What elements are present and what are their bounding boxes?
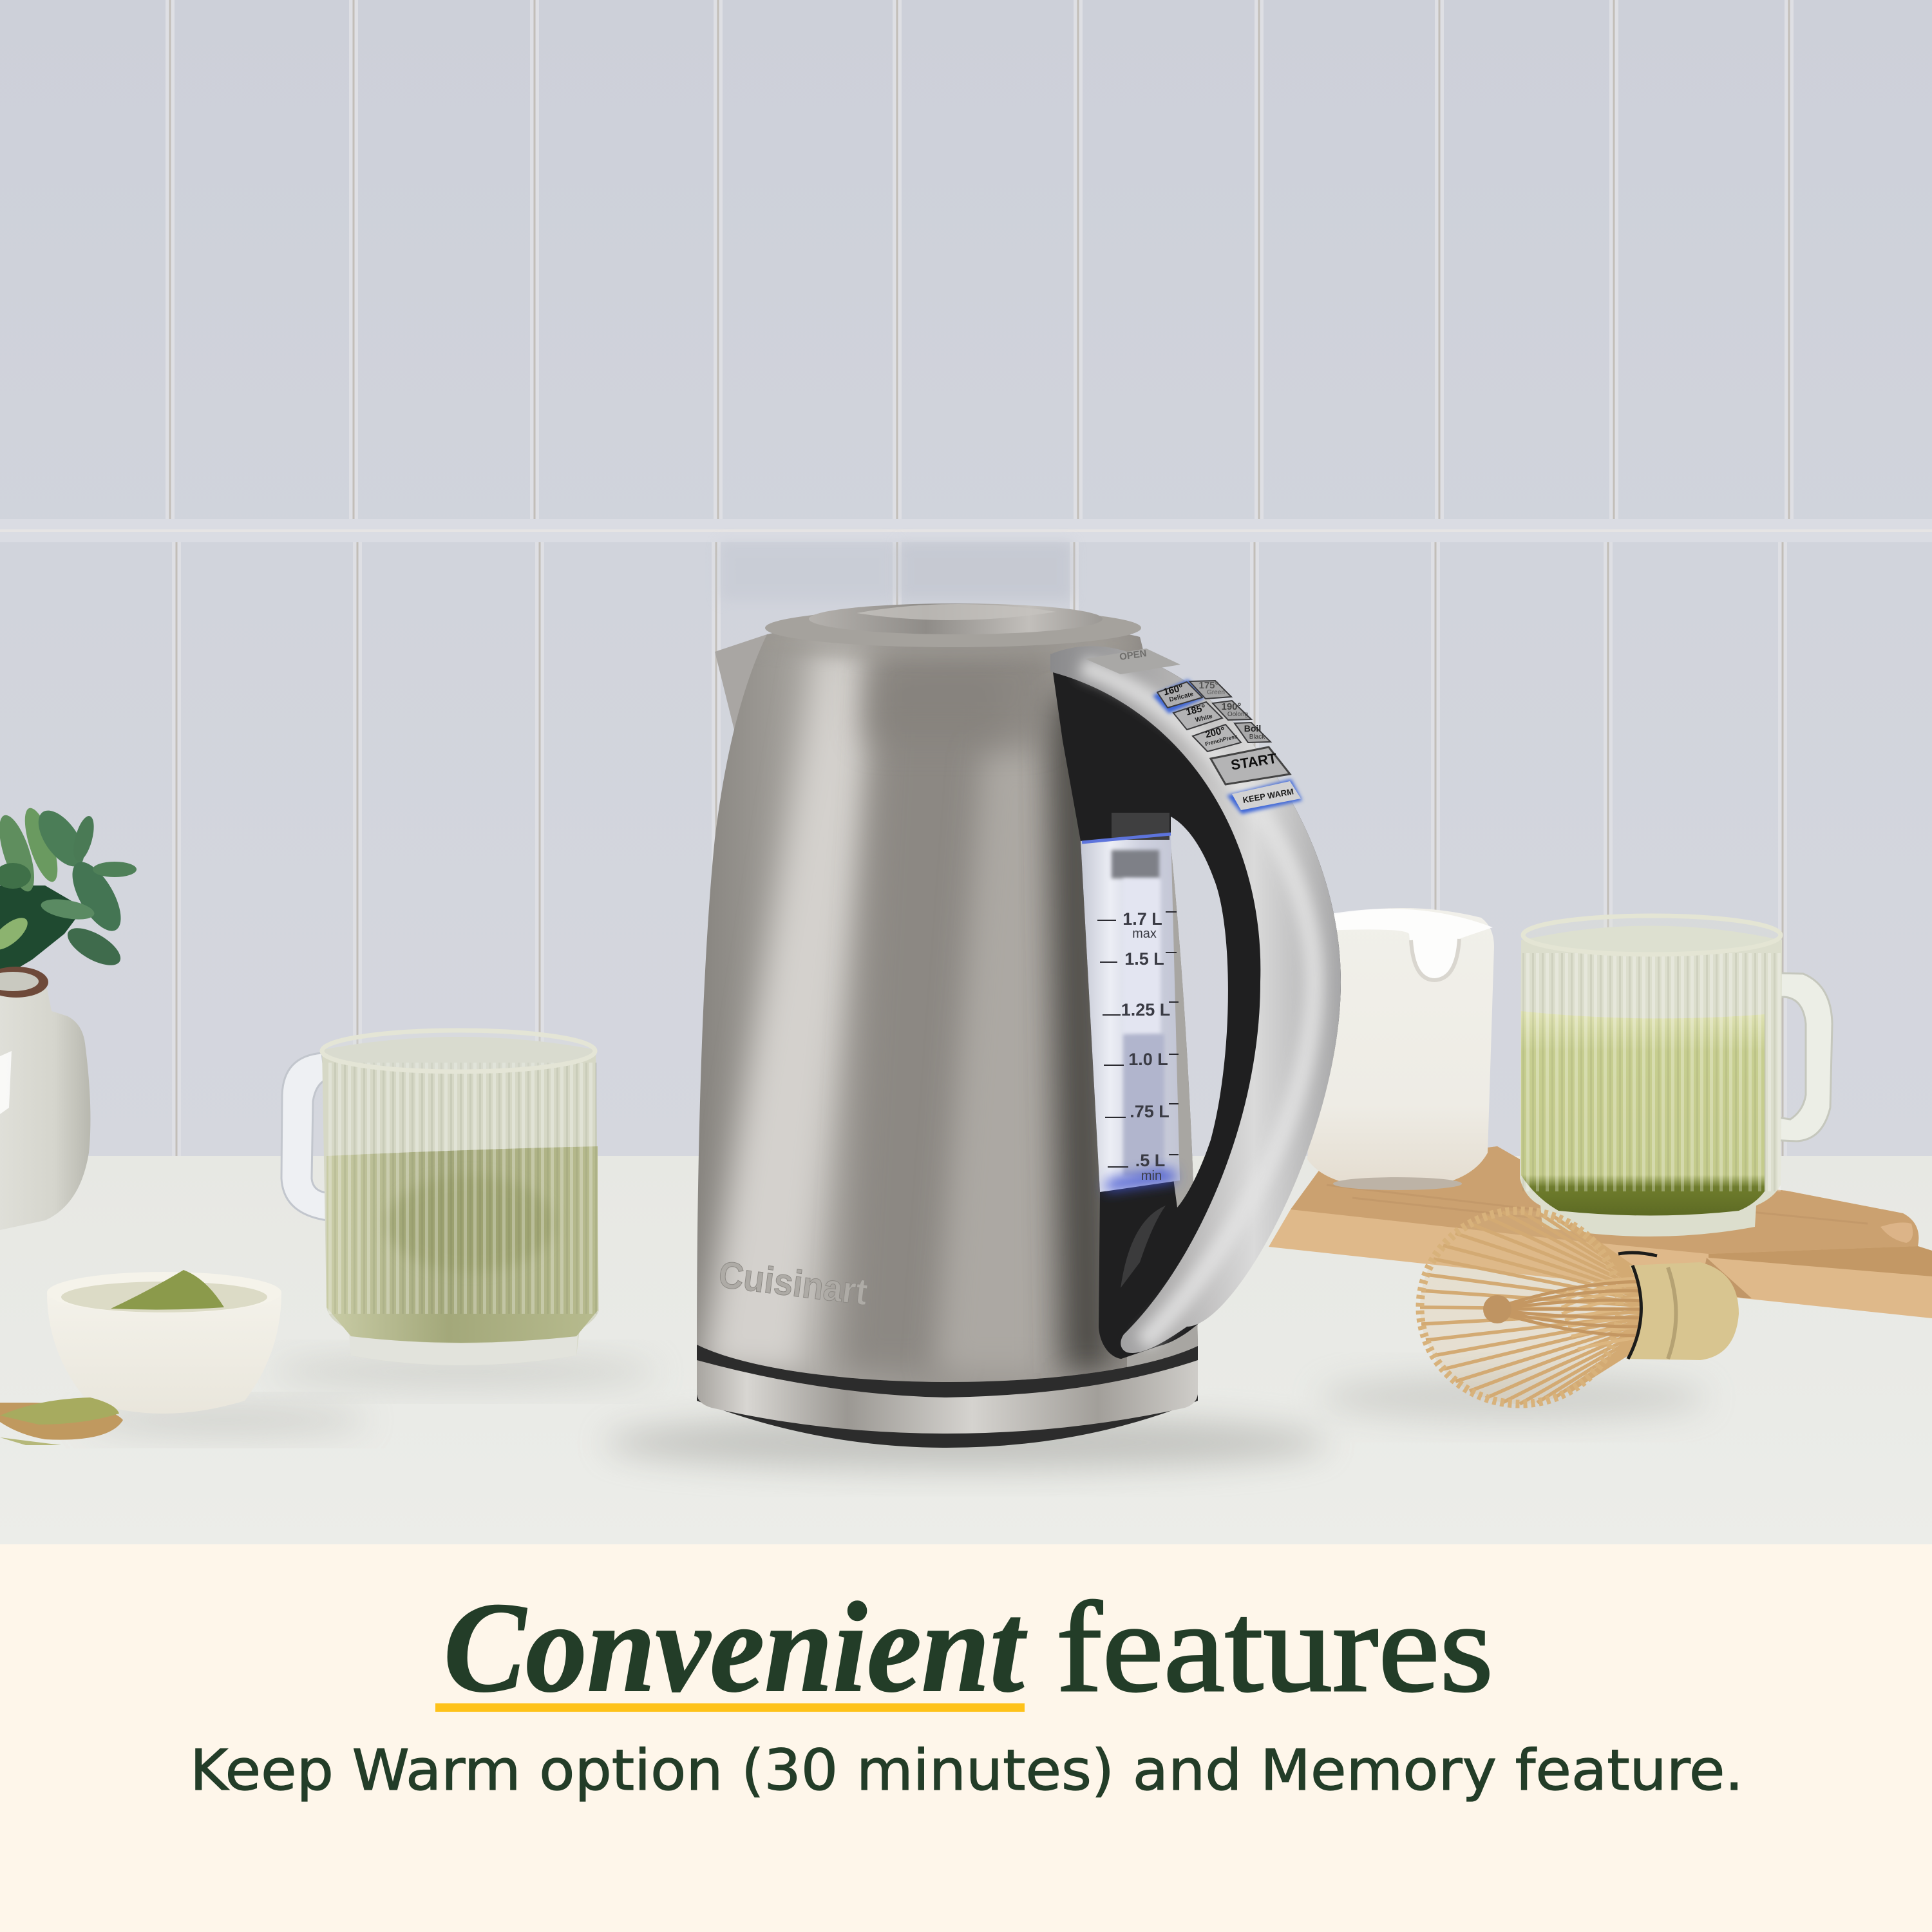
button 190	[1213, 701, 1251, 720]
button start	[1211, 747, 1290, 784]
mug handle	[281, 1053, 327, 1220]
whisk inner cone	[1497, 1282, 1644, 1336]
button 200: 200°	[1204, 725, 1226, 741]
plant dark mass	[0, 886, 84, 979]
whisk binding	[1618, 1253, 1657, 1359]
heading: Convenient	[444, 1577, 1027, 1719]
caption panel	[0, 1544, 1932, 1932]
button 200	[1193, 724, 1241, 752]
whisk front tines	[1562, 1278, 1644, 1349]
handle grip highlight	[1121, 1206, 1166, 1288]
level labels: 1.7 L	[1122, 909, 1162, 929]
button 160: 160°	[1162, 683, 1184, 698]
ceramic vase	[0, 967, 90, 1230]
wooden spoon	[0, 1397, 123, 1445]
photo scene	[0, 0, 1932, 1544]
button 175: 175°	[1198, 680, 1219, 691]
button 175: Green	[1207, 689, 1225, 696]
control panel buttons	[1085, 648, 1302, 814]
open button: OPEN	[1119, 648, 1148, 663]
whisk curled rim	[1420, 1211, 1620, 1404]
button start: START	[1229, 750, 1278, 773]
heading underline	[435, 1703, 1025, 1712]
plant	[0, 803, 137, 979]
level labels: 1.0 L	[1128, 1050, 1168, 1069]
milk pitcher	[1307, 908, 1494, 1190]
matcha powder	[111, 1270, 224, 1310]
button 185: White	[1195, 713, 1213, 724]
handle highlight	[1082, 667, 1314, 1343]
leaves	[0, 803, 137, 972]
level labels: .75 L	[1130, 1102, 1170, 1121]
kettle body	[689, 605, 1204, 1397]
button 200: FrenchPress	[1204, 733, 1238, 747]
level labels: min	[1141, 1169, 1162, 1183]
button boil	[1235, 723, 1271, 743]
panel background	[0, 1544, 1932, 1932]
level labels	[1121, 909, 1170, 1183]
level labels: max	[1132, 927, 1157, 941]
level labels: .5 L	[1135, 1151, 1165, 1170]
button 160: Delicate	[1168, 690, 1195, 704]
button 190: Oolong	[1227, 711, 1248, 718]
button boil: Black	[1249, 734, 1265, 741]
water level window	[1081, 813, 1180, 1192]
heading: features	[1056, 1577, 1493, 1719]
left glass mug with matcha	[281, 1030, 599, 1365]
mug glass	[1520, 926, 1782, 1236]
whisk body tint	[1420, 1211, 1620, 1404]
button boil: Boil	[1244, 723, 1261, 734]
level labels: 1.5 L	[1124, 949, 1164, 969]
matcha liquid	[327, 1146, 598, 1343]
tiled wall	[0, 0, 1932, 1159]
mug handle	[1732, 972, 1832, 1141]
button keep warm: KEEP WARM	[1242, 786, 1294, 805]
matcha bowl	[47, 1270, 281, 1414]
button 190: 190°	[1221, 701, 1242, 712]
button 185	[1173, 702, 1222, 730]
counter top	[0, 1156, 1932, 1544]
whisk handle	[1626, 1262, 1739, 1360]
level tick marks	[1097, 912, 1179, 1167]
heading	[444, 1577, 1493, 1719]
bamboo matcha whisk	[1420, 1211, 1739, 1404]
right glass mug with matcha	[1520, 916, 1832, 1236]
handle black grip	[1050, 649, 1341, 1359]
mug glass	[322, 1037, 599, 1365]
handle silver band	[1050, 646, 1341, 1353]
mug base ring	[349, 1334, 578, 1365]
brand embossing: Cuisinart	[716, 1253, 870, 1313]
whisk tines	[1420, 1211, 1644, 1404]
mug rim	[322, 1030, 595, 1072]
kettle spout	[715, 634, 767, 737]
button 185: 185°	[1185, 703, 1207, 718]
electric kettle	[689, 603, 1341, 1448]
subtitle: Keep Warm option (30 minutes) and Memory feature.	[190, 1738, 1743, 1803]
matcha liquid	[1521, 1011, 1765, 1216]
kettle base	[697, 1343, 1198, 1448]
kettle lid	[765, 603, 1141, 647]
button 175	[1189, 680, 1231, 699]
open button	[1085, 648, 1180, 674]
button keep warm	[1232, 781, 1301, 810]
level labels: 1.25 L	[1121, 1000, 1170, 1019]
whisk knot	[1483, 1295, 1511, 1323]
mug rim	[1523, 916, 1781, 954]
cutting board	[1269, 1146, 1932, 1318]
counter shadows	[84, 1356, 1707, 1470]
button 160	[1157, 682, 1202, 708]
